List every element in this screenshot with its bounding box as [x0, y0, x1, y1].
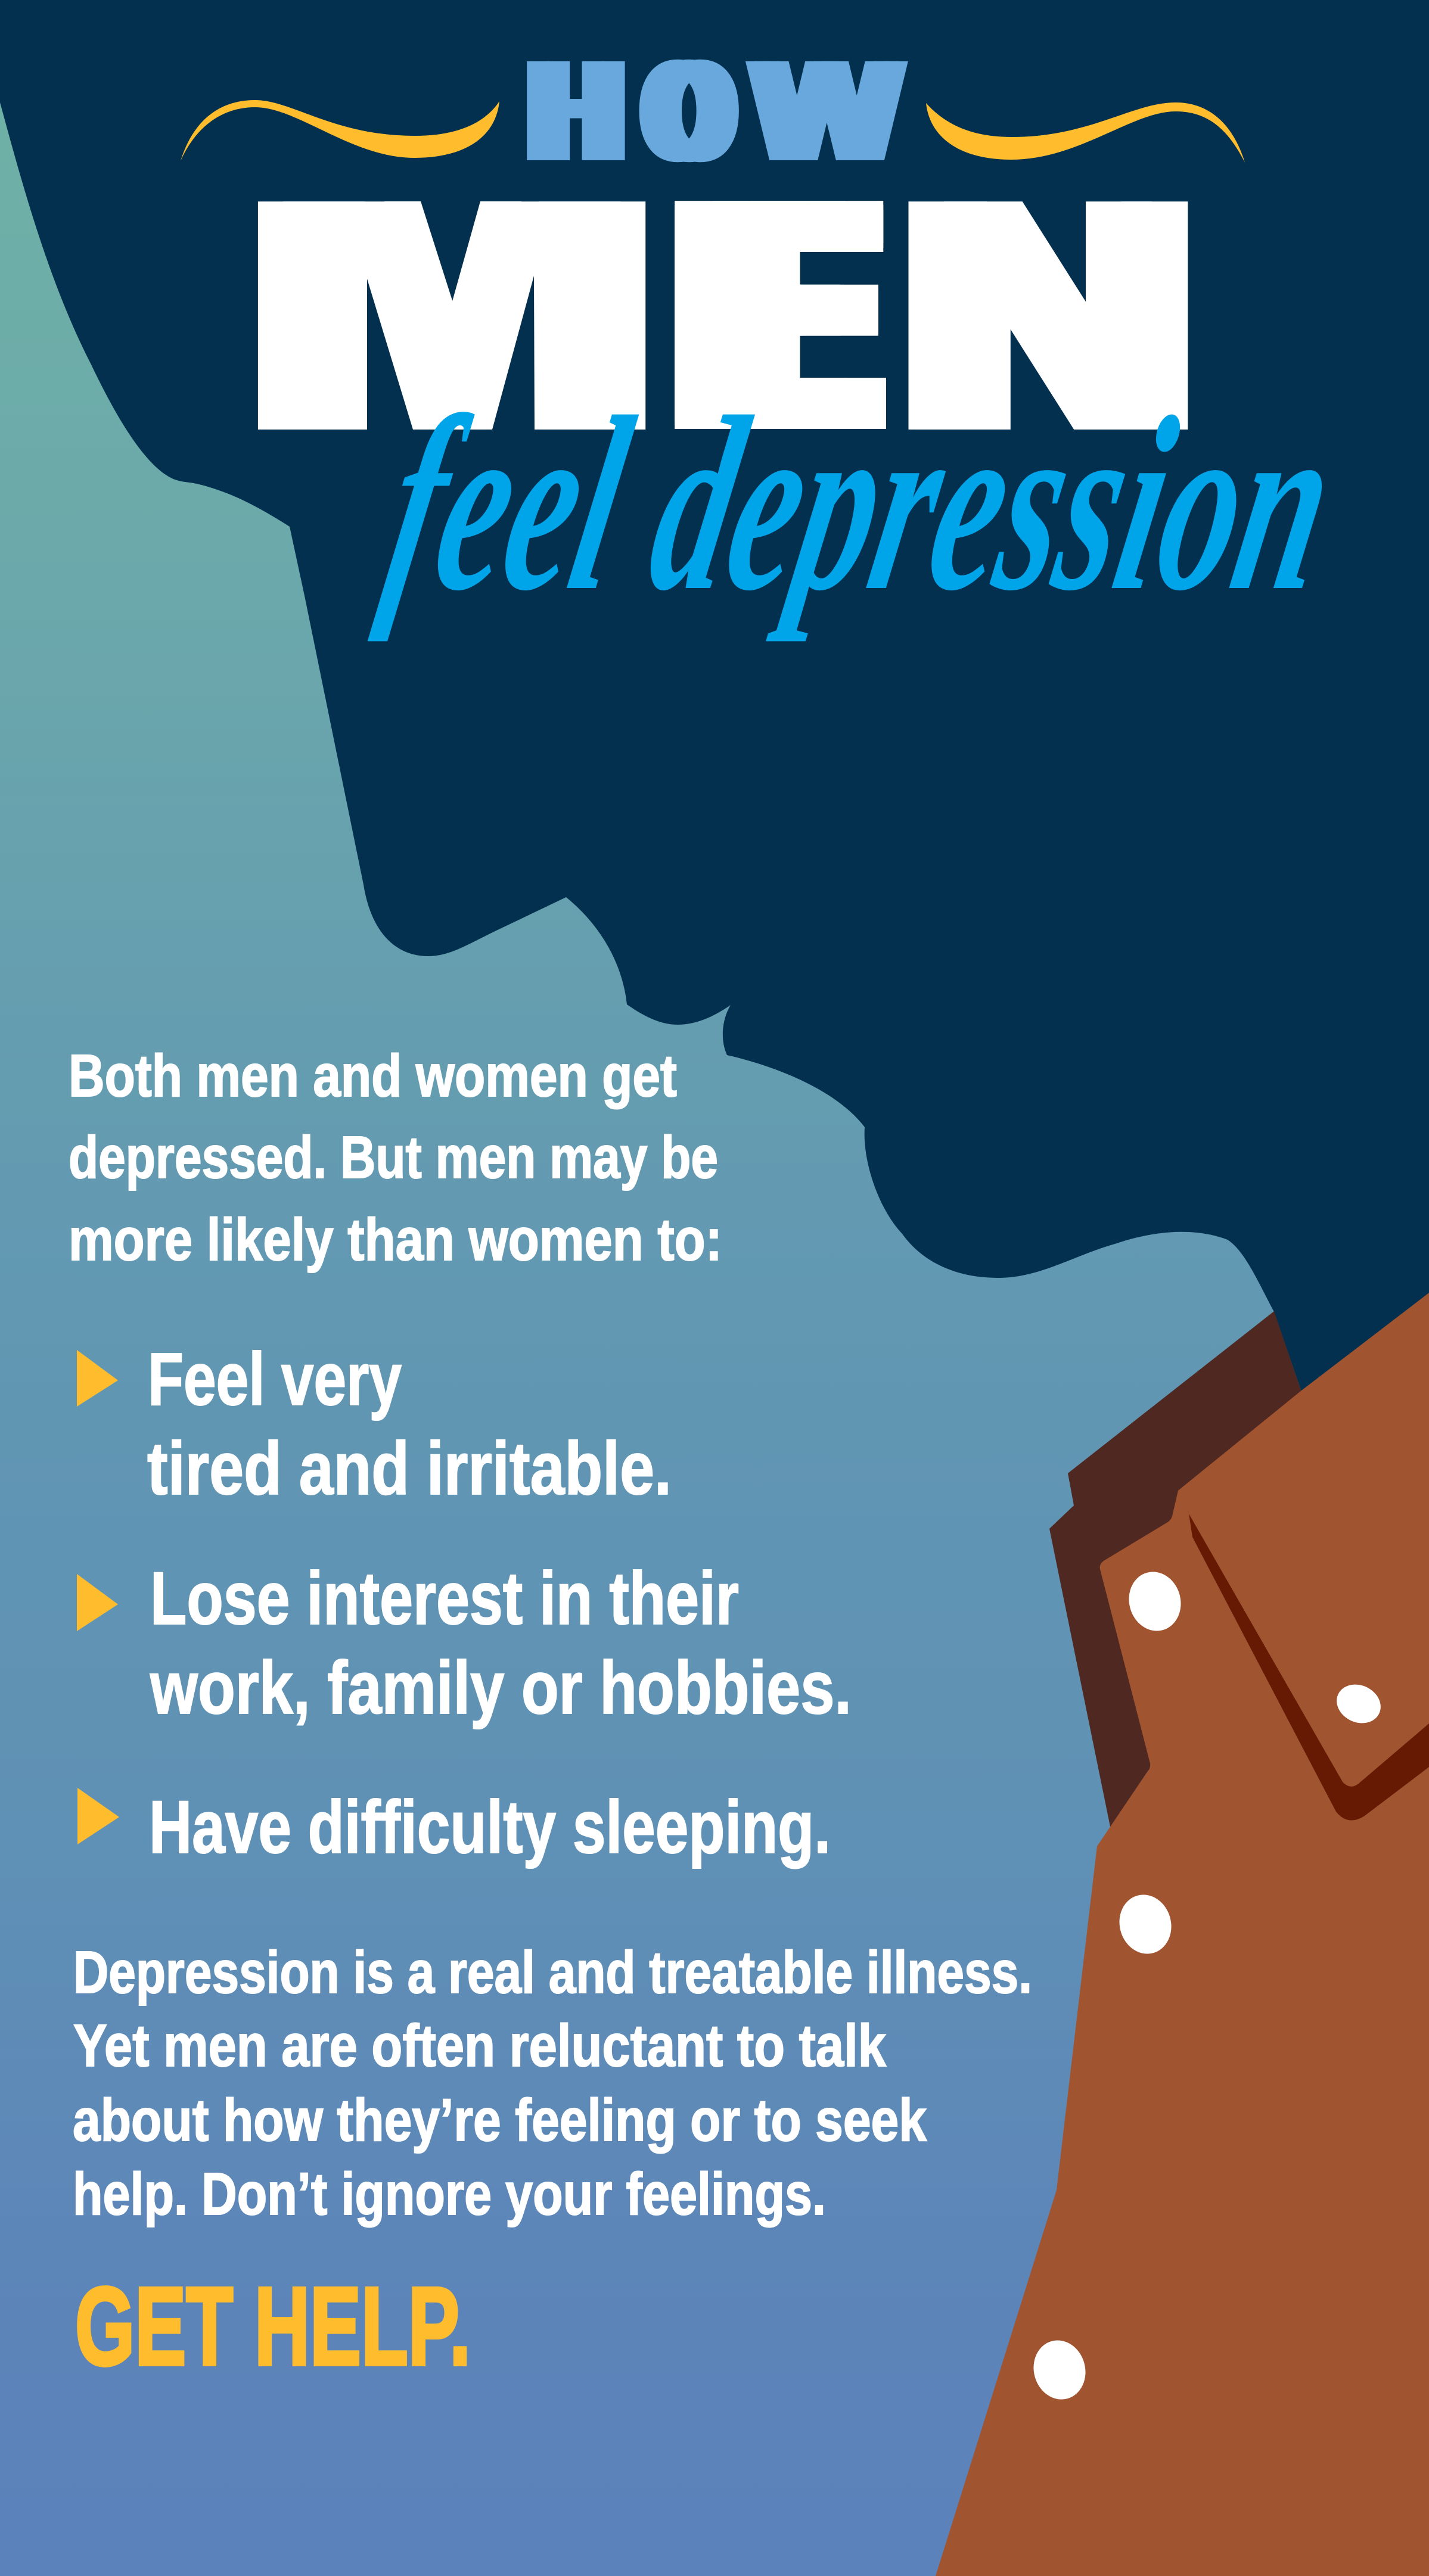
button 3	[1113, 1889, 1178, 1959]
text: W	[741, 34, 894, 192]
bullet text 2: Lose interest in their	[150, 1557, 739, 1640]
dark head silhouette	[0, 0, 1429, 1489]
text: O	[634, 34, 722, 192]
bullet icon 3	[77, 1788, 119, 1844]
bullet icon 2	[77, 1574, 118, 1631]
right gold flourish	[926, 102, 1245, 163]
button 2	[1330, 1678, 1387, 1730]
intro paragraph: depressed. But men may be	[69, 1124, 718, 1191]
jacket pocket flap shadow	[1189, 1514, 1429, 1821]
bullet text 3: Have difficulty sleeping.	[149, 1786, 831, 1869]
intro paragraph	[69, 1043, 722, 1273]
bullet text 1: tired and irritable.	[147, 1427, 672, 1510]
bullet text 2: work, family or hobbies.	[150, 1647, 852, 1729]
closing paragraph: Depression is a real and treatable illness.	[73, 1939, 1032, 2006]
call to action: GET HELP: GET HELP.	[75, 2265, 471, 2388]
left gold flourish	[181, 100, 499, 161]
shirt collar	[1049, 1311, 1311, 1827]
button 1	[1123, 1566, 1187, 1637]
text: M	[217, 139, 662, 503]
button 4	[1027, 2335, 1092, 2405]
title word: HOW	[516, 34, 908, 192]
bullet text 1	[147, 1338, 672, 1510]
text: N	[874, 139, 1186, 503]
text: E	[651, 145, 829, 496]
bullet text 1: Feel very	[148, 1338, 402, 1421]
closing paragraph	[73, 1939, 1032, 2227]
closing paragraph: Yet men are often reluctant to talk	[73, 2012, 886, 2079]
bullet icon 1	[77, 1350, 118, 1407]
intro paragraph: more likely than women to:	[69, 1206, 722, 1273]
intro paragraph: Both men and women get	[69, 1043, 677, 1109]
text: H	[516, 34, 615, 192]
title word: MEN	[217, 139, 1188, 503]
heavy-weight adjustment of the M counters	[355, 201, 548, 430]
bullet text 2	[150, 1557, 852, 1729]
closing paragraph: help. Don’t ignore your feelings.	[73, 2161, 826, 2227]
closing paragraph: about how they’re feeling or to seek	[73, 2087, 927, 2154]
jacket body	[936, 1293, 1429, 2576]
